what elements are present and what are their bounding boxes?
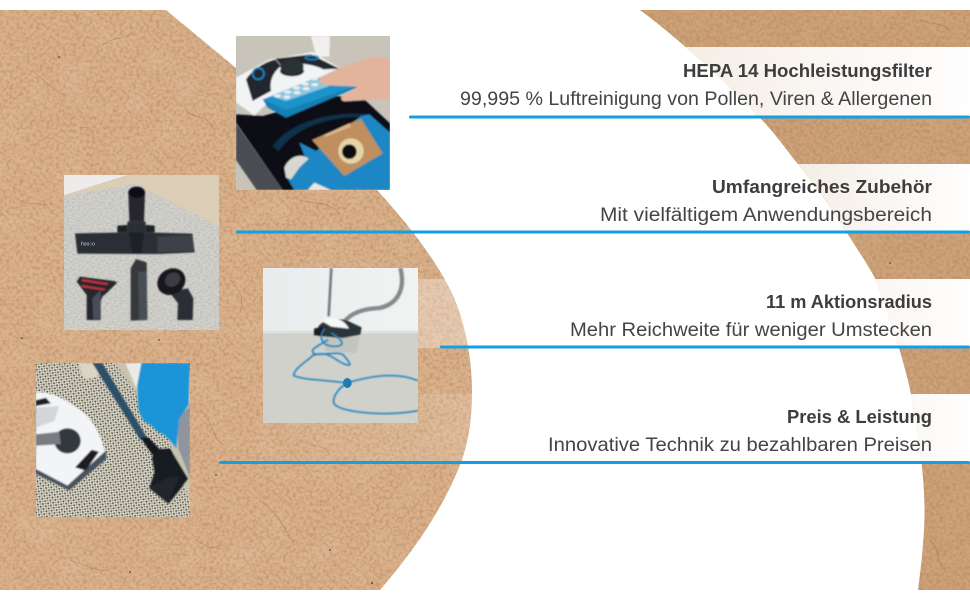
blue line 2 — [236, 230, 970, 234]
photo: floor nozzle on carpet — [36, 363, 190, 517]
translucent bands behind text — [324, 47, 970, 462]
feature 3: action radius text: Mehr Reichweite für weniger Umstecken — [570, 320, 932, 341]
feature 2: accessories text: Umfangreiches Zubehör — [712, 177, 932, 197]
feature 2: accessories text — [600, 177, 932, 226]
feature 1: HEPA filter text — [460, 61, 932, 110]
feature 4: price and performance text: Preis & Leistung — [787, 407, 932, 427]
feature 4: price and performance text — [548, 407, 932, 456]
feature 3: action radius text: 11 m Aktionsradius — [766, 292, 932, 312]
photo: accessories — [64, 175, 219, 330]
blue line 1 — [409, 116, 970, 118]
feature 2: accessories text: Mit vielfältigem Anwendungsbereich — [600, 205, 932, 226]
photo: cable reach — [263, 268, 418, 423]
blue line 3 — [440, 346, 970, 348]
feature 3: action radius text — [570, 292, 932, 341]
feature 1: HEPA filter text: HEPA 14 Hochleistungsfilter — [683, 61, 932, 81]
brand wordmark: hoooo — [81, 242, 95, 248]
blue line 4 — [219, 461, 970, 464]
feature 4: price and performance text: Innovative Technik zu bezahlbaren Preisen — [548, 435, 932, 456]
photo: HEPA filter — [236, 36, 390, 190]
feature 1: HEPA filter text: 99,995 % Luftreinigung von Pollen, Viren & Allergenen — [460, 89, 932, 110]
